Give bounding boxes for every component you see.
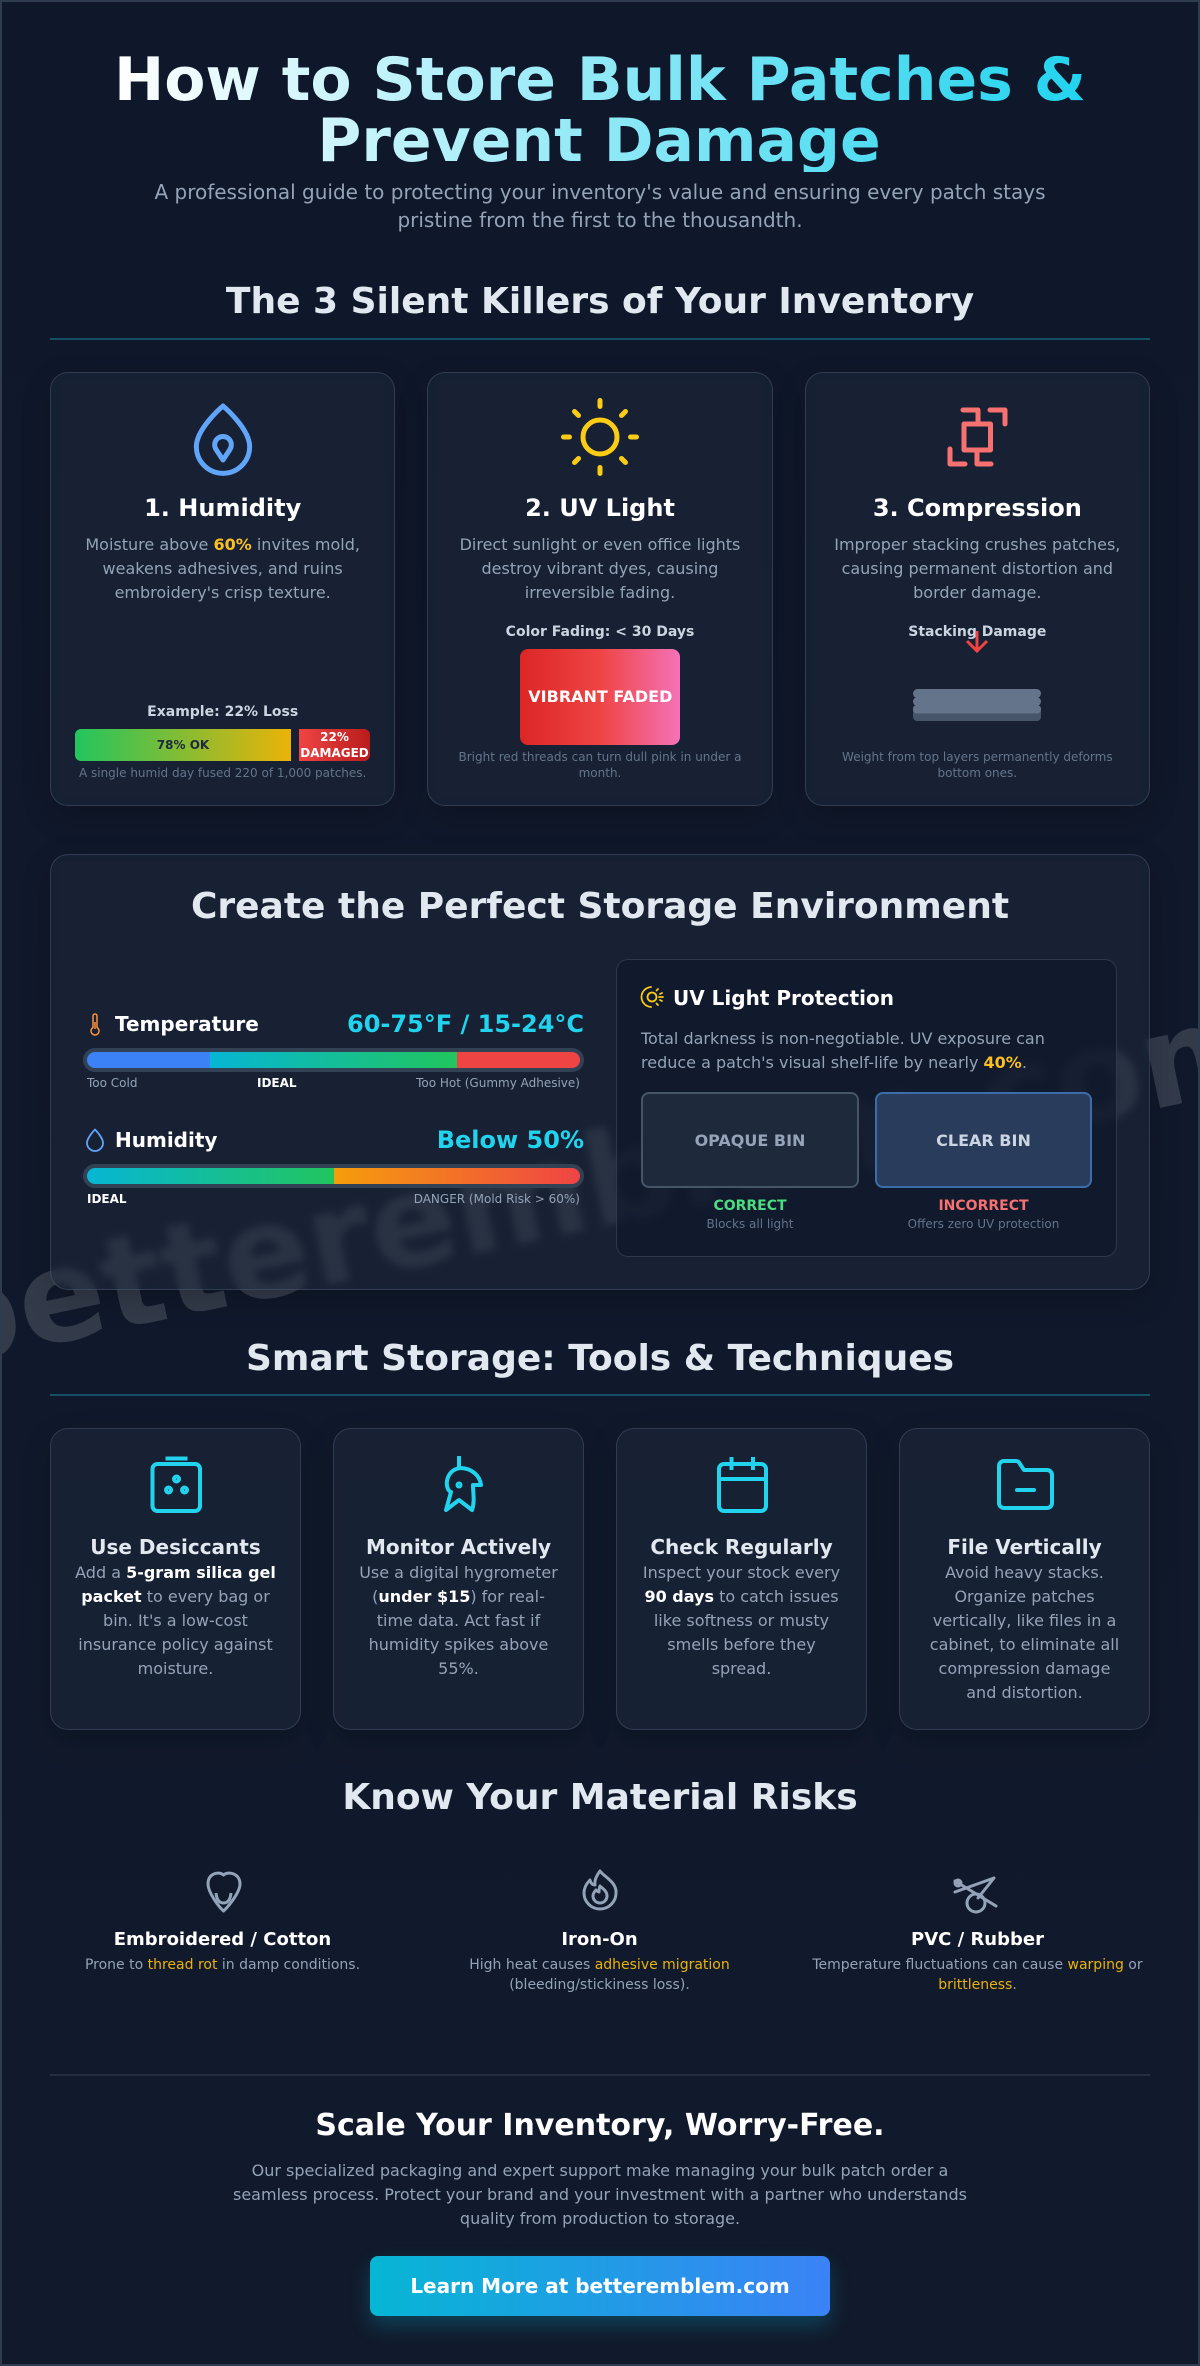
stacked bar: 22 damaged: 22% [320,730,349,744]
icon: calendar [717,1457,768,1513]
note: Weight from top layers permanently deforms [842,750,1113,764]
icon: compression [948,408,1008,466]
meter: humidity [83,1126,584,1206]
title: How to Store Bulk Patches & [114,45,1086,115]
gauge labels [87,1192,580,1206]
text [643,1563,840,1678]
gauge labels: IDEAL [257,1076,297,1090]
value: Below 50% [437,1126,584,1154]
title: Check Regularly [650,1535,833,1559]
gauge labels: Too Hot (Gummy Adhesive) [416,1076,580,1090]
panel: uv protection [616,959,1117,1257]
text: insurance policy against [78,1635,273,1654]
clear bin [875,1092,1092,1188]
text: bin. It's a low-cost [103,1611,248,1630]
title: File Vertically [947,1535,1102,1559]
label: Humidity [115,1128,217,1152]
text: Prone to thread rot in damp conditions. [85,1957,360,1973]
icon: drop [86,1128,104,1152]
cta text: seamless process. Protect your brand and your investment with a partner who understands [233,2185,967,2204]
gauge labels [86,1076,580,1090]
gauge labels: DANGER (Mold Risk > 60%) [414,1192,580,1206]
text [469,1957,730,1993]
caption: Offers zero UV protection [908,1217,1059,1231]
text: (under $15) for real- [372,1587,545,1606]
icon: heart [206,1872,242,1913]
heading: materials: Know Your Material Risks [342,1777,858,1818]
cta text: Our specialized packaging and expert support make managing your bulk patch order a [252,2161,948,2180]
text: packet to every bag or [81,1587,270,1606]
title: Embroidered / Cotton [114,1929,331,1950]
stacked bar: 22 damaged: DAMAGED [300,746,369,760]
text [812,1957,1143,1993]
subtitle: pristine from the first to the thousandth. [397,208,803,232]
subtitle [154,180,1046,232]
card title: 1. Humidity [144,494,301,522]
description [460,535,740,602]
text: like softness or musty [654,1611,829,1630]
title: PVC / Rubber [911,1929,1044,1950]
icon: warped pvc [953,1876,998,1914]
heading: silent killers: The 3 Silent Killers of Your Inventory [226,281,974,322]
text: cabinet, to eliminate all [930,1635,1119,1654]
note: month. [579,766,621,780]
text [640,1029,1045,1072]
card title: 2. UV Light [525,494,675,522]
note: A single humid day fused 220 of 1,000 patches. [79,766,366,780]
icon: folder [997,1459,1054,1510]
colour fade swatch [520,649,680,745]
icon: desiccant packet [150,1456,202,1513]
panel: monitor [333,1428,584,1730]
panel: humidity card [50,372,395,806]
cta button [370,2256,830,2316]
gauge bar [83,1048,584,1072]
text: humidity spikes above [369,1635,548,1654]
description [834,535,1120,602]
chart label: Color Fading: < 30 Days [506,624,694,640]
panel: desiccants [50,1428,301,1730]
footer divider [50,2074,1150,2076]
description: embroidery's crisp texture. [115,583,331,602]
text: Total darkness is non-negotiable. UV exposure can [641,1029,1045,1048]
description: Moisture above 60% invites mold, [85,535,360,554]
icon: sun [561,398,639,476]
text: 55%. [438,1659,479,1678]
text: High heat causes adhesive migration [469,1957,730,1973]
panel heading: Create the Perfect Storage Environment [191,886,1009,927]
text: Organize patches [954,1587,1095,1606]
clear bin: CLEAR BIN [936,1130,1031,1150]
title: Monitor Actively [366,1535,551,1559]
text: (bleeding/stickiness loss). [509,1977,690,1993]
verdict: incorrect: INCORRECT [938,1198,1029,1214]
title: Use Desiccants [90,1535,261,1559]
description: Improper stacking crushes patches, [834,535,1120,554]
text: compression damage [939,1659,1110,1678]
opaque bin [641,1092,859,1188]
gauge labels: Too Cold [87,1076,137,1090]
description: Direct sunlight or even office lights [460,535,740,554]
text [75,1563,276,1678]
chart label: Stacking Damage [908,624,1046,640]
icon: flame [582,1869,618,1910]
meter: temperature [83,1010,584,1090]
text: moisture. [138,1659,213,1678]
cta text [233,2161,967,2228]
text: Add a 5-gram silica gel [75,1563,276,1582]
text: Temperature fluctuations can cause warping or [812,1957,1143,1973]
description: border damage. [913,583,1041,602]
opaque bin: OPAQUE BIN [695,1130,805,1150]
card title: 3. Compression [873,494,1082,522]
text [930,1563,1119,1702]
icon: water drop [194,403,252,476]
text [359,1563,558,1678]
cta text: quality from production to storage. [460,2209,740,2228]
diagram: compressed stack with arrow [913,631,1041,721]
icon: thermometer [90,1013,100,1036]
description: irreversible fading. [525,583,675,602]
text: vertically, like files in a [933,1611,1116,1630]
material: iron-on [469,1869,730,1993]
text: reduce a patch's visual shelf-life by nearly 40%. [641,1053,1027,1072]
colour fade swatch: VIBRANT FADED [528,687,672,706]
note: Bright red threads can turn dull pink in under a [458,750,742,764]
description [85,535,360,602]
note: bottom ones. [938,766,1017,780]
stacked bar: 78 ok: 78% OK [157,738,209,752]
panel: uv light card [427,372,773,806]
material: embroidered [85,1872,360,1973]
material: pvc [812,1876,1143,1993]
text: 90 days to catch issues [644,1587,839,1606]
note [842,750,1113,780]
panel: compression card [805,372,1150,806]
description: causing permanent distortion and [842,559,1113,578]
heading: tools: Smart Storage: Tools & Techniques [246,1338,954,1379]
chart label: Example: 22% Loss [147,704,298,720]
stacked bar: 78 ok [75,729,291,761]
text: Inspect your stock every [643,1563,840,1582]
icon: hygrometer [444,1456,483,1512]
icon: uv gear [640,986,664,1008]
title: Prevent Damage [317,106,881,176]
gauge bar [83,1164,584,1188]
panel: file [899,1428,1150,1730]
text: spread. [712,1659,771,1678]
cta button: Learn More at betteremblem.com [410,2274,790,2298]
value: 60-75°F / 15-24°C [347,1010,584,1038]
note [458,750,742,780]
stacked bar: 22 damaged [299,729,370,761]
cta heading: Scale Your Inventory, Worry-Free. [315,2108,885,2143]
verdict: correct: CORRECT [713,1198,787,1214]
text: Use a digital hygrometer [359,1563,558,1582]
title: Iron-On [561,1929,638,1950]
caption: Blocks all light [707,1217,793,1231]
gauge labels: IDEAL [87,1192,127,1206]
text: and distortion. [966,1683,1083,1702]
text: Avoid heavy stacks. [945,1563,1104,1582]
panel: check [616,1428,867,1730]
label: Temperature [115,1012,259,1036]
panel: storage environment [50,854,1150,1290]
text: brittleness. [938,1977,1017,1993]
heading: UV Light Protection [673,986,894,1010]
text: smells before they [667,1635,816,1654]
title [114,50,1084,172]
description: weakens adhesives, and ruins [103,559,343,578]
subtitle: A professional guide to protecting your inventory's value and ensuring every patch stays [154,180,1046,204]
description: destroy vibrant dyes, causing [482,559,718,578]
text: time data. Act fast if [377,1611,540,1630]
